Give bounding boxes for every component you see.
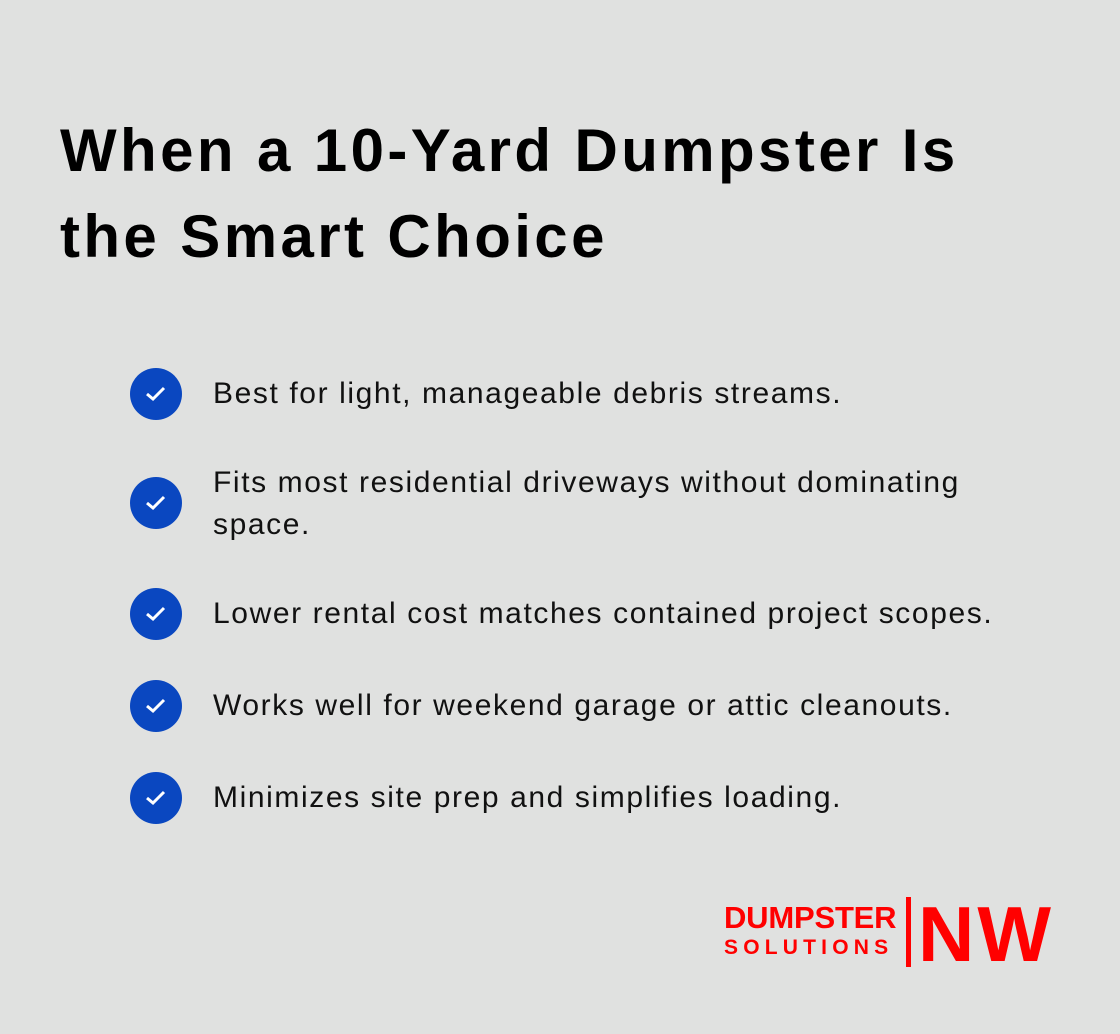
item 4 xyxy=(130,680,953,732)
logo: DUMPSTER xyxy=(724,900,896,935)
item 2: Fits most residential driveways without dominating xyxy=(213,466,960,499)
item 2 xyxy=(130,466,960,541)
icon: check xyxy=(130,588,182,640)
item 3: Lower rental cost matches contained project scopes. xyxy=(213,597,993,630)
item 5: Minimizes site prep and simplifies loading. xyxy=(213,781,842,814)
item 4: Works well for weekend garage or attic cleanouts. xyxy=(213,689,953,722)
item 2: space. xyxy=(213,508,311,541)
item 5 xyxy=(130,772,842,824)
icon: check xyxy=(130,680,182,732)
item 1: Best for light, manageable debris streams. xyxy=(213,377,842,410)
logo: SOLUTIONS xyxy=(724,936,893,959)
icon: check xyxy=(130,772,182,824)
item 3 xyxy=(130,588,993,640)
title xyxy=(60,117,959,270)
title: the Smart Choice xyxy=(60,203,608,270)
item 1 xyxy=(130,368,842,420)
title: When a 10-Yard Dumpster Is xyxy=(60,117,959,184)
icon: check xyxy=(130,477,182,529)
logo: NW xyxy=(918,890,1054,978)
logo xyxy=(724,890,1054,978)
icon: check xyxy=(130,368,182,420)
